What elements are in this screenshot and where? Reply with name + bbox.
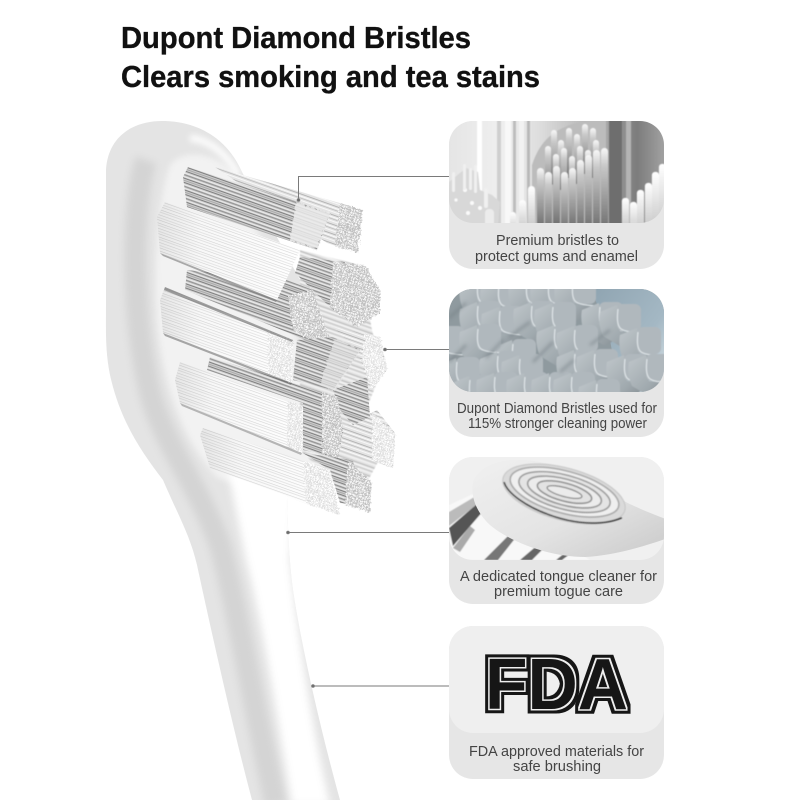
front tuft 3 bbox=[175, 362, 303, 455]
rear top tuft bbox=[215, 167, 363, 253]
caption: safe brushing bbox=[513, 758, 601, 775]
panel: diamond bristles bbox=[449, 289, 664, 437]
caption bbox=[475, 232, 638, 265]
bristle macro image bbox=[449, 121, 664, 223]
toothbrush illustration bbox=[100, 115, 395, 800]
leader line: diamond bristles bbox=[384, 348, 449, 351]
caption bbox=[469, 743, 644, 775]
leader line: tongue cleaner bbox=[287, 531, 449, 534]
leader line: bristles bbox=[297, 176, 449, 201]
leader line: FDA bbox=[312, 685, 449, 687]
caption: Dupont Diamond Bristles used for bbox=[457, 400, 657, 417]
caption bbox=[460, 568, 657, 600]
lower back tuft bbox=[207, 357, 372, 513]
centre right tufts bbox=[293, 327, 395, 468]
brush head and neck bbox=[100, 115, 350, 800]
caption: premium togue care bbox=[494, 583, 623, 600]
caption: FDA approved materials for bbox=[469, 743, 644, 760]
panel: tongue cleaner bbox=[445, 453, 668, 604]
upper back tuft bbox=[183, 167, 330, 250]
title bbox=[121, 20, 540, 94]
head with cleaner bbox=[473, 490, 664, 557]
panel: premium bristles bbox=[445, 117, 668, 269]
caption bbox=[457, 400, 657, 432]
FDA logo: FDA bbox=[485, 645, 628, 725]
panel: FDA bbox=[449, 626, 664, 779]
front tuft 1 bbox=[157, 202, 300, 302]
caption: 115% stronger cleaning power bbox=[468, 415, 647, 432]
cube macro image bbox=[449, 289, 664, 392]
concentric ridges bbox=[502, 463, 626, 525]
caption: protect gums and enamel bbox=[475, 248, 638, 265]
caption: Premium bristles to bbox=[496, 232, 619, 249]
cluster backing bbox=[300, 250, 388, 498]
front tuft 2 bbox=[160, 287, 293, 385]
front tuft 4 bbox=[200, 428, 340, 515]
title: Clears smoking and tea stains bbox=[121, 59, 540, 94]
bristle tufts bbox=[157, 167, 395, 515]
title: Dupont Diamond Bristles bbox=[121, 20, 471, 55]
right tuft 1 bbox=[295, 257, 380, 327]
caption: A dedicated tongue cleaner for bbox=[460, 568, 657, 585]
middle back tuft bbox=[185, 270, 330, 343]
tongue cleaner image bbox=[449, 457, 664, 560]
